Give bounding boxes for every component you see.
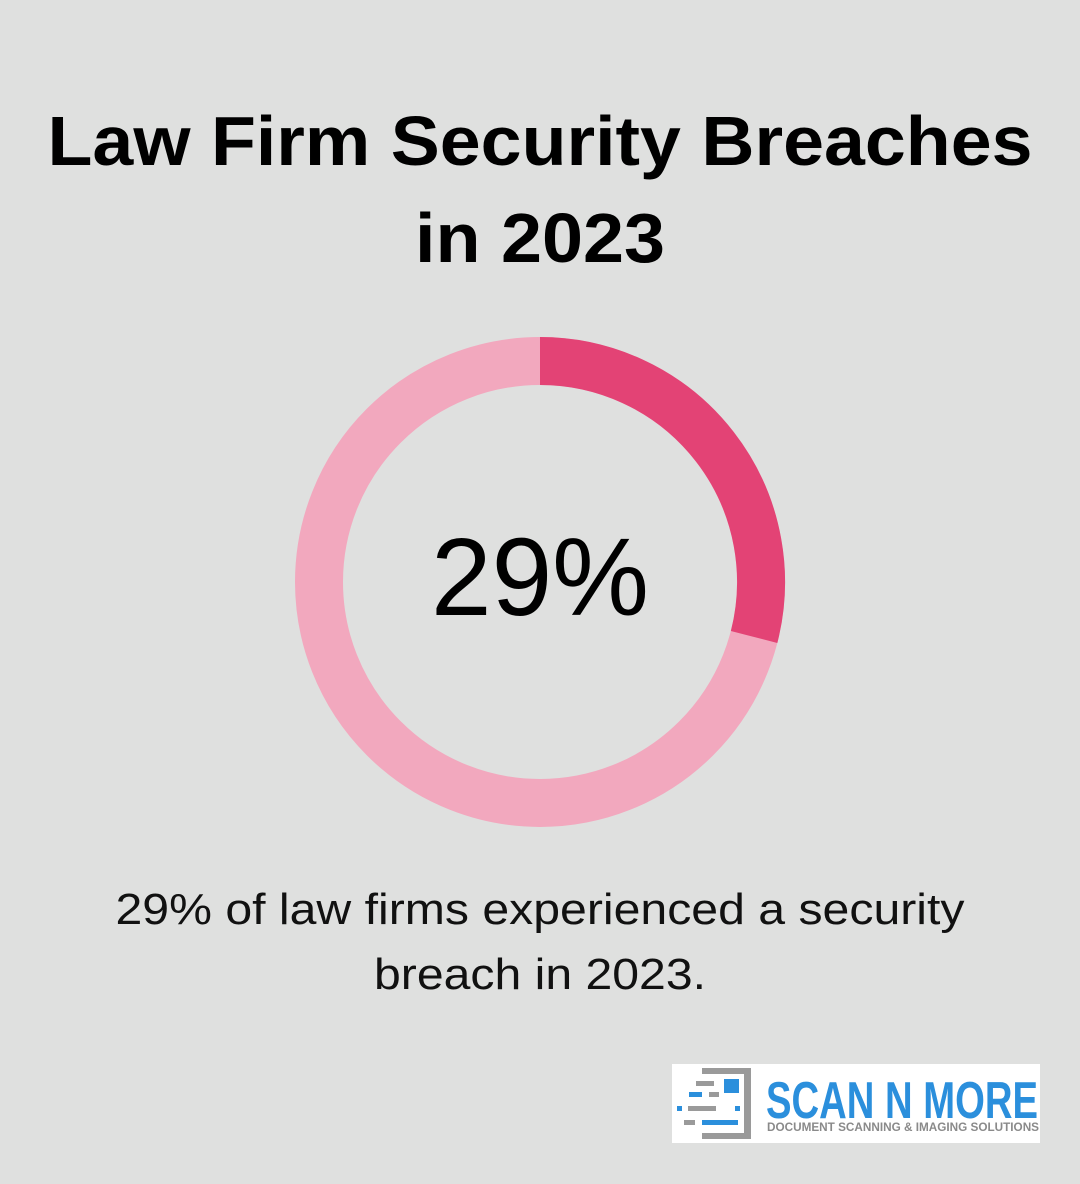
center value: 29% [431,516,649,639]
title [48,102,1032,277]
logo: DOCUMENT SCANNING & IMAGING SOLUTIONS [767,1120,1039,1134]
logo [672,1064,1040,1143]
description: 29% of law firms experienced a security [116,885,964,934]
logo icon [677,1068,751,1139]
description [116,885,964,999]
title: Law Firm Security Breaches [48,102,1032,180]
title: in 2023 [415,199,665,277]
description: breach in 2023. [374,950,706,999]
donut chart [319,361,761,803]
